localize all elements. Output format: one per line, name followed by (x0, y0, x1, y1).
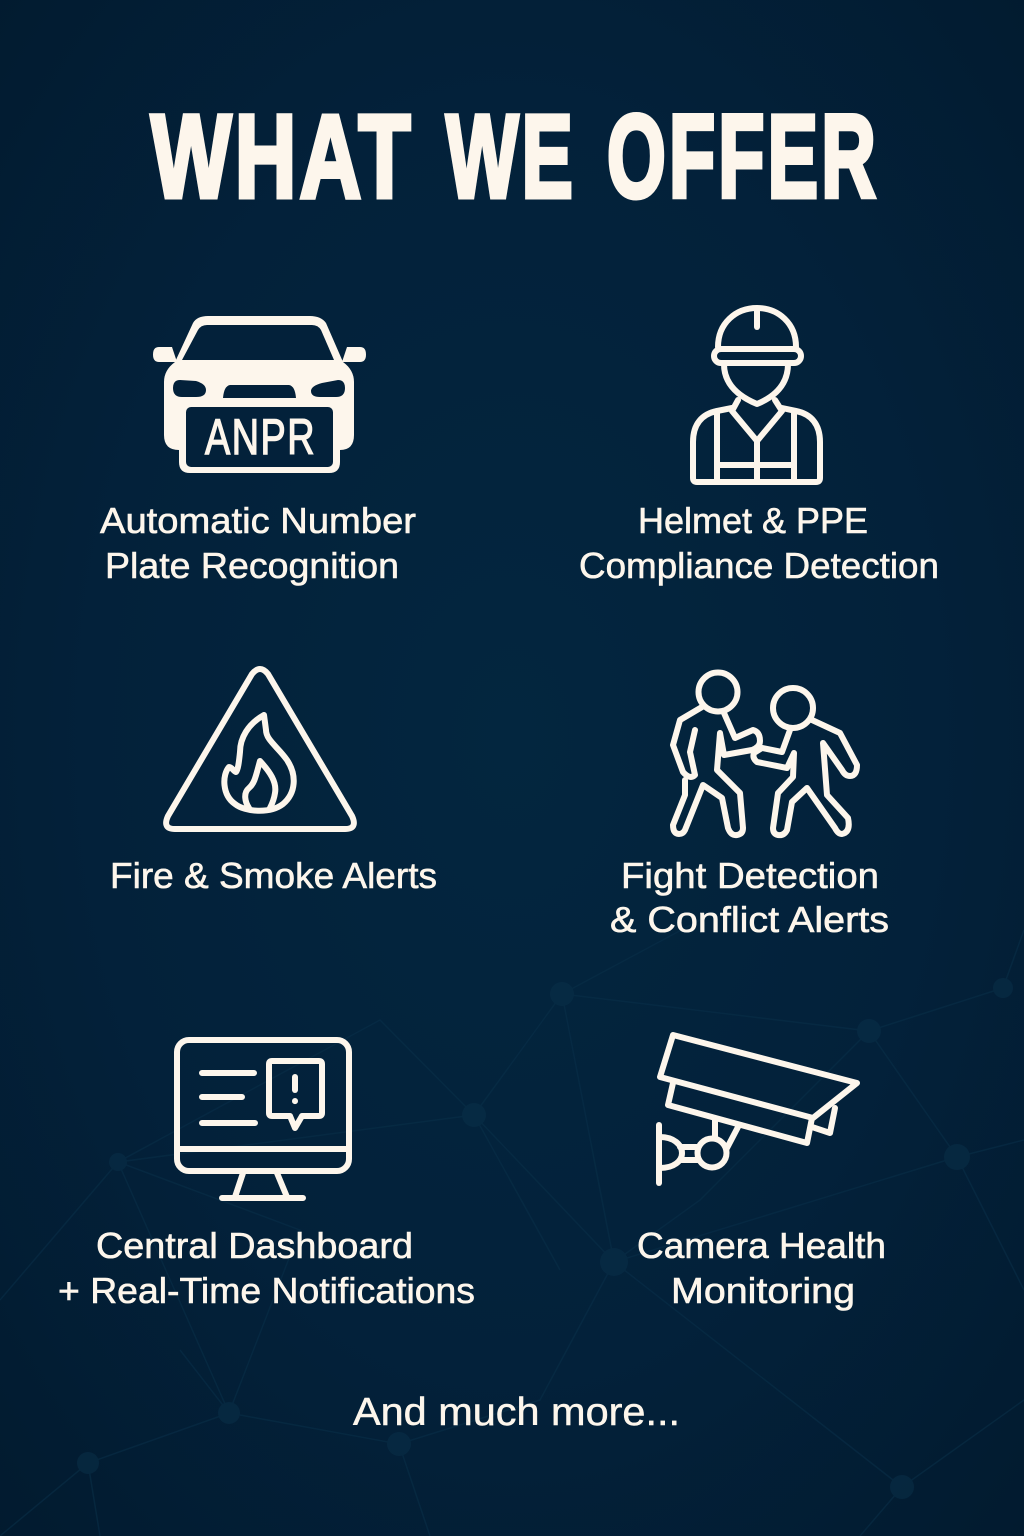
panel: central dashboard and real-time notifications (58, 1040, 475, 1311)
label: Compliance Detection (579, 545, 939, 586)
label: Camera Health (637, 1225, 886, 1266)
icon: warning triangle with flame (166, 669, 354, 829)
label (58, 1225, 475, 1311)
label: Fire & Smoke Alerts (110, 855, 437, 896)
label: + Real-Time Notifications (58, 1270, 475, 1311)
panel: fire and smoke alerts (110, 669, 437, 896)
label (637, 1225, 886, 1311)
label: Helmet & PPE (638, 500, 868, 541)
panel: automatic number plate recognition (100, 316, 416, 586)
label (579, 500, 939, 586)
icon: car with ANPR plate (153, 316, 366, 473)
title (151, 91, 879, 223)
title: WE (446, 91, 576, 223)
panel: fight detection and conflict alerts (610, 672, 889, 940)
label: Monitoring (671, 1270, 855, 1311)
label (100, 500, 416, 586)
icon: worker with helmet and vest (693, 308, 820, 482)
icon: two people fighting (673, 672, 857, 835)
label (610, 855, 889, 940)
label: Fight Detection (621, 855, 879, 896)
panel: camera health monitoring (637, 1035, 886, 1311)
title: OFFER (607, 91, 879, 223)
icon: monitor with alert bubble (177, 1040, 349, 1198)
background network pattern (0, 920, 1024, 1536)
label: Plate Recognition (105, 545, 399, 586)
label: & Conflict Alerts (610, 899, 889, 940)
icon: security camera (659, 1035, 857, 1183)
label: Automatic Number (100, 500, 416, 541)
icon: car with ANPR plate: ANPR (205, 409, 316, 465)
title: WHAT (151, 91, 414, 223)
panel: helmet and PPE compliance detection (579, 308, 939, 586)
label: Central Dashboard (96, 1225, 413, 1266)
closing line: And much more... (353, 1391, 680, 1434)
